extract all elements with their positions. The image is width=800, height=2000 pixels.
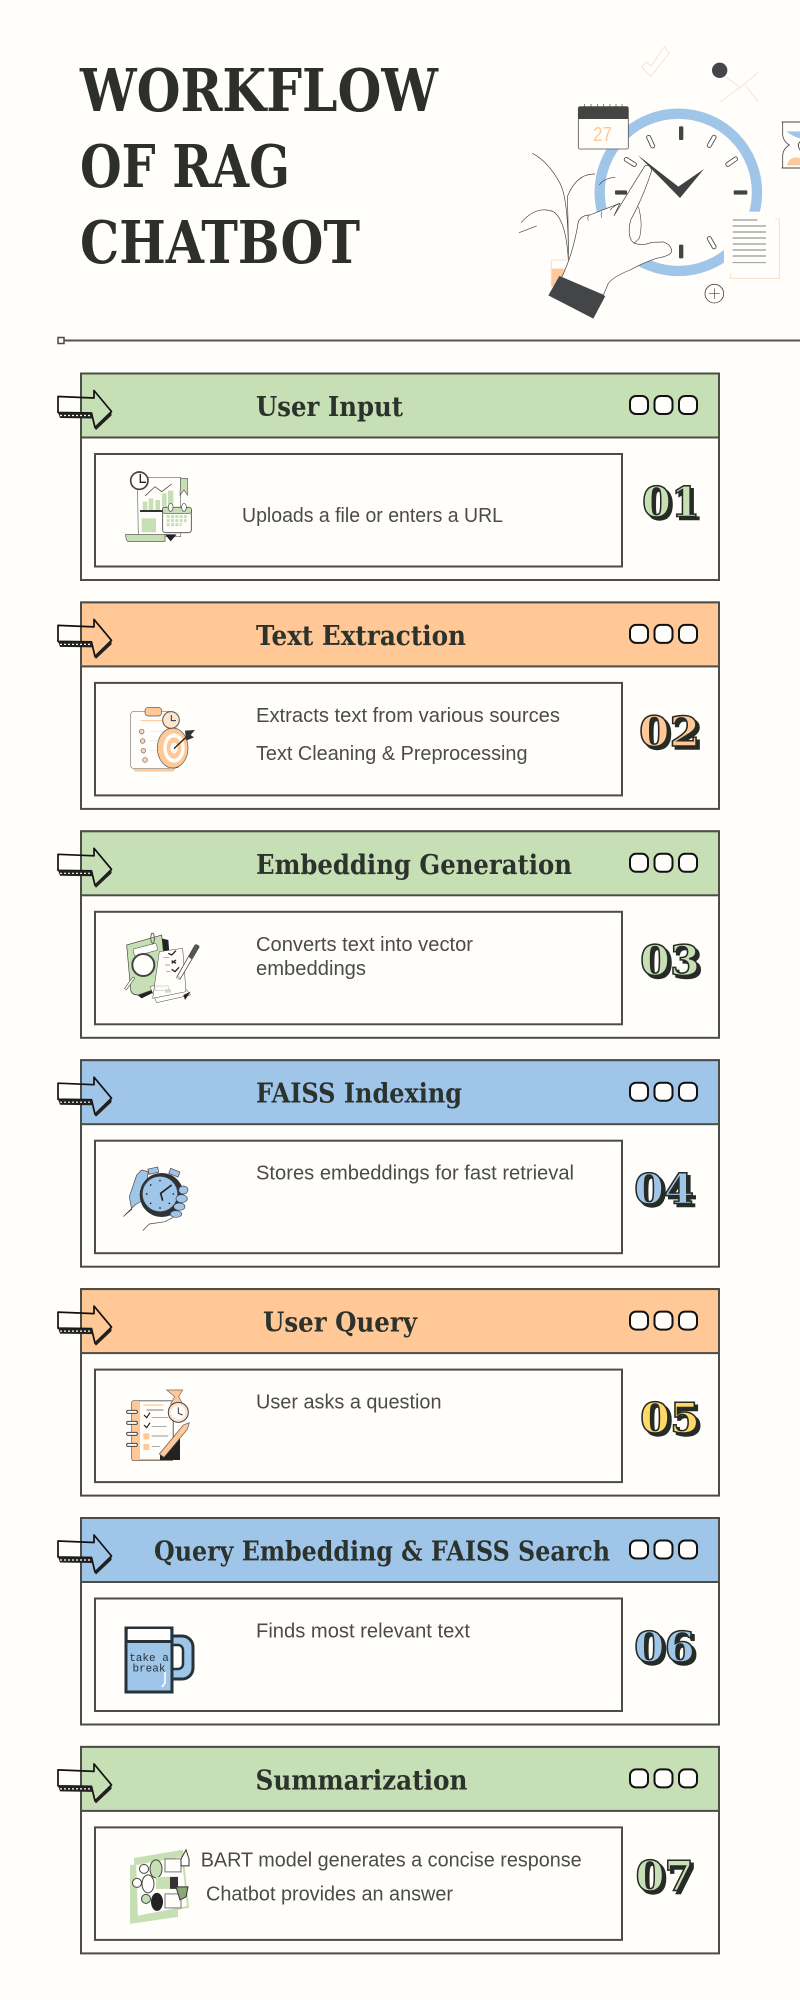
clock ring — [600, 114, 757, 271]
hand — [562, 165, 672, 295]
description: BART model generates a concise response — [201, 1849, 582, 1871]
inner box — [95, 683, 622, 795]
inner box — [95, 912, 622, 1024]
illustration: hand and clock — [519, 47, 800, 319]
panel frame — [81, 1289, 719, 1496]
icon: notebook, hourglass and pencil — [127, 1390, 189, 1461]
icon: folder, magnifier and checklist — [126, 933, 200, 1003]
panel frame — [81, 1060, 719, 1267]
panel: faiss indexing — [58, 1060, 719, 1267]
step number: 01 — [642, 478, 700, 526]
panel frame — [81, 1518, 719, 1724]
window dots — [630, 396, 697, 414]
description: Stores embeddings for fast retrieval — [256, 1163, 574, 1185]
arrow icon — [58, 390, 112, 430]
panel: query embedding and faiss search — [58, 1518, 719, 1724]
window dots — [630, 1083, 697, 1101]
description: embeddings — [256, 958, 366, 980]
description: Chatbot provides an answer — [206, 1883, 453, 1905]
title: CHATBOT — [80, 208, 360, 277]
panel: user input — [58, 374, 719, 580]
heading: FAISS Indexing — [256, 1078, 462, 1110]
window dots — [630, 1769, 697, 1787]
step number: 06 — [634, 1624, 695, 1672]
description — [256, 705, 560, 765]
window dots — [630, 1540, 697, 1558]
document — [724, 212, 779, 278]
title: OF RAG — [80, 132, 290, 201]
heading: Summarization — [256, 1764, 468, 1796]
description: Text Cleaning & Preprocessing — [256, 743, 528, 765]
sleeve cuff — [548, 276, 605, 319]
step number: 03 — [640, 937, 700, 985]
step number: 04 — [634, 1166, 694, 1214]
header band — [81, 1060, 719, 1124]
icon: take a break mug: take a — [129, 1653, 169, 1665]
arrow icon — [58, 1077, 112, 1117]
icon: report and calendar — [126, 472, 191, 542]
description: Extracts text from various sources — [256, 705, 560, 727]
header band — [81, 831, 719, 895]
inner box — [95, 1141, 622, 1253]
icon: check mark — [642, 47, 669, 77]
arrow icon — [58, 1535, 112, 1574]
panel frame — [81, 831, 719, 1038]
clock ticks — [615, 126, 747, 258]
divider line — [58, 338, 800, 344]
icon: stopwatch in hand — [123, 1167, 188, 1231]
arrow icon — [58, 1306, 112, 1346]
plus circle — [705, 284, 724, 303]
description — [201, 1849, 582, 1905]
window dots — [630, 854, 697, 872]
panel: summarization — [58, 1747, 719, 1953]
panel frame — [81, 374, 719, 580]
step number: 02 — [639, 708, 700, 756]
description: Uploads a file or enters a URL — [242, 505, 503, 527]
description: Converts text into vector — [256, 934, 473, 956]
inner box — [95, 1827, 622, 1940]
hand detail — [588, 203, 641, 243]
description — [256, 934, 473, 980]
calendar: 27 — [593, 123, 612, 146]
header band — [81, 602, 719, 666]
window dots — [630, 625, 697, 643]
arrow icon — [58, 619, 112, 659]
window dots — [630, 1312, 697, 1330]
panel: text extraction — [58, 602, 719, 809]
panel frame — [81, 1747, 719, 1953]
inner box — [95, 1370, 622, 1482]
header band — [81, 1289, 719, 1353]
panel: embedding generation — [58, 831, 719, 1038]
icon: feedback board — [130, 1850, 189, 1924]
glass — [551, 260, 570, 287]
header band — [81, 1747, 719, 1811]
plant — [519, 153, 615, 260]
icon: take a break mug — [126, 1628, 193, 1692]
panel: user query — [58, 1289, 719, 1496]
panel frame — [81, 602, 719, 809]
heading: User Input — [256, 391, 403, 423]
title: WORKFLOW — [79, 56, 439, 125]
header band — [81, 1518, 719, 1582]
icon: clipboard and target — [131, 707, 195, 772]
hourglass — [782, 122, 800, 168]
arrow icon — [58, 848, 112, 888]
step number: 07 — [636, 1852, 694, 1900]
title — [79, 56, 439, 277]
clock hands — [638, 155, 704, 198]
heading: User Query — [263, 1307, 418, 1339]
description: User asks a question — [256, 1392, 442, 1414]
heading: Embedding Generation — [256, 849, 572, 881]
step number: 05 — [640, 1395, 700, 1443]
description: Finds most relevant text — [256, 1620, 470, 1642]
heading: Text Extraction — [256, 620, 466, 652]
icon: take a break mug: break — [132, 1664, 166, 1676]
icon: dot and crossed lines — [712, 63, 758, 102]
arrow icon — [58, 1764, 112, 1803]
heading: Query Embedding & FAISS Search — [154, 1536, 610, 1568]
header band — [81, 374, 719, 438]
inner box — [95, 1598, 622, 1711]
inner box — [95, 454, 622, 566]
calendar — [578, 104, 628, 149]
